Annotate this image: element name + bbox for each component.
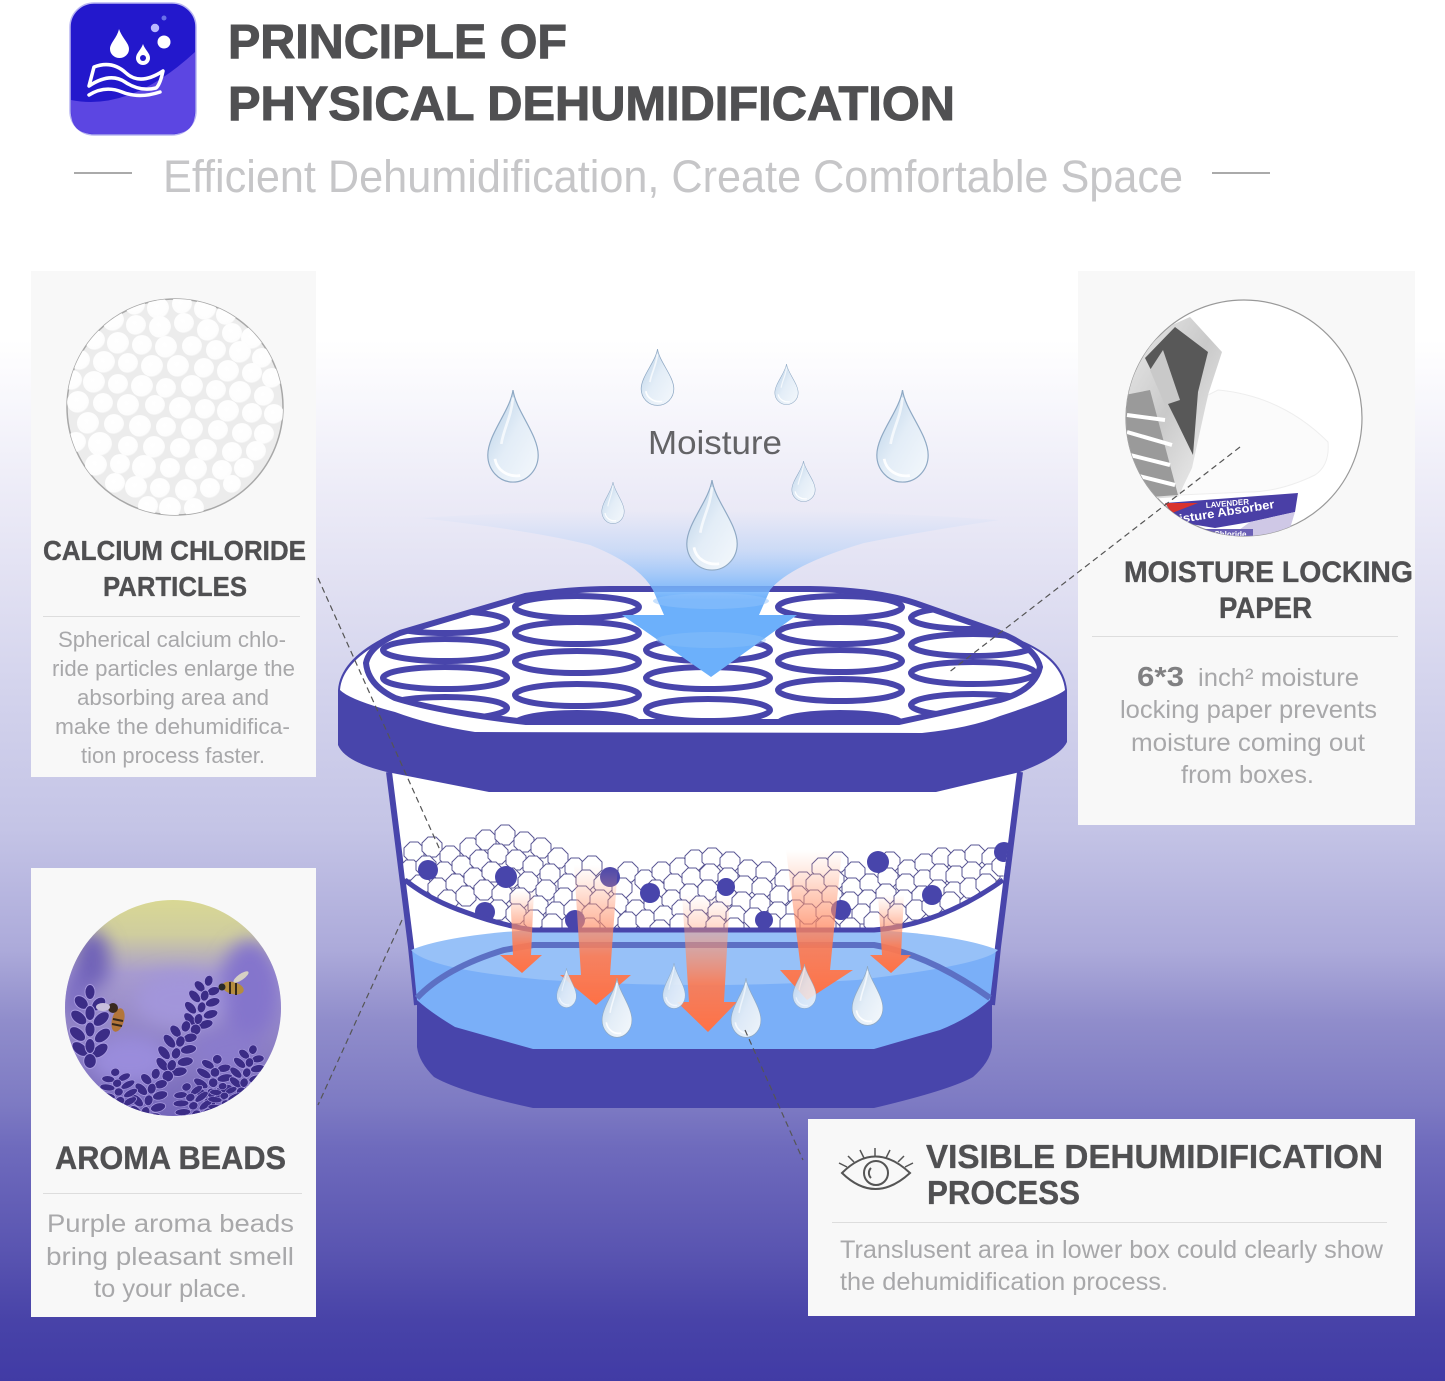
body text: aroma beads: Purple aroma beads xyxy=(47,1210,294,1238)
photo: opened box with foil seal: Chloride xyxy=(1214,530,1247,539)
heading: moisture locking paper: PAPER xyxy=(1219,592,1312,625)
body text: moisture locking paper: locking paper prevents xyxy=(1120,696,1377,724)
inner basket curve xyxy=(405,880,1003,930)
icon: eye xyxy=(839,1148,913,1189)
lid xyxy=(338,587,1067,792)
body text: calcium chloride: tion process faster. xyxy=(81,743,265,768)
body text: moisture locking paper xyxy=(1120,661,1377,789)
heading: moisture locking paper: MOISTURE LOCKING xyxy=(1124,556,1413,589)
dashed leader lines xyxy=(318,447,1240,1160)
orange moisture arrows xyxy=(500,850,911,1032)
body text: calcium chloride: absorbing area and xyxy=(77,685,269,710)
heading: moisture locking paper xyxy=(1124,556,1413,625)
body text: moisture locking paper: 6*3 xyxy=(1137,661,1184,692)
calcium chloride granules xyxy=(403,824,1008,928)
droplets inside box xyxy=(557,963,883,1037)
label: moisture: Moisture xyxy=(648,424,782,461)
heading: visible dehumidification process: PROCESS xyxy=(927,1174,1080,1211)
heading: calcium chloride particles: PARTICLES xyxy=(103,571,247,602)
panel: aroma beads xyxy=(31,868,316,1317)
blue moisture funnel arrow xyxy=(420,509,1000,677)
panel: visible dehumidification process xyxy=(808,1119,1415,1316)
photo: opened box with foil seal xyxy=(1115,300,1362,540)
body text: calcium chloride: ride particles enlarge the xyxy=(52,656,295,681)
body text: moisture locking paper: from boxes. xyxy=(1181,761,1314,789)
body text: calcium chloride: Spherical calcium chlo- xyxy=(58,627,286,652)
app icon: water drops and waves xyxy=(70,3,196,135)
water reservoir xyxy=(411,930,998,1049)
icon: bees xyxy=(96,969,250,1033)
body text: visible dehumidification: Translusent area in lower box could clearly show xyxy=(840,1236,1384,1264)
photo: lavender and bees xyxy=(63,900,281,1133)
panel: calcium chloride particles xyxy=(31,271,316,777)
body text: calcium chloride xyxy=(52,627,295,768)
body text: aroma beads: bring pleasant smell xyxy=(46,1243,294,1271)
body text: visible dehumidification: the dehumidification process. xyxy=(840,1268,1168,1296)
body text: visible dehumidification xyxy=(840,1236,1384,1296)
body text: calcium chloride: make the dehumidifica- xyxy=(55,714,290,739)
body text: aroma beads: to your place. xyxy=(94,1275,247,1303)
heading: calcium chloride particles: CALCIUM CHLORIDE xyxy=(43,535,306,566)
subtitle with side rules: Efficient Dehumidification, Create Comfortable Space xyxy=(163,151,1183,202)
title: PRINCIPLE OF xyxy=(228,16,567,69)
heading: visible dehumidification process: VISIBLE DEHUMIDIFICATION xyxy=(926,1138,1383,1175)
body text: moisture locking paper: moisture coming out xyxy=(1131,729,1365,757)
box lower body xyxy=(389,772,1020,1108)
panel: moisture locking paper xyxy=(1078,271,1415,825)
water droplets xyxy=(488,349,928,570)
photo: opened box with foil seal: isture Absorber xyxy=(1178,497,1276,526)
title xyxy=(228,16,955,131)
dehumidifier box illustration xyxy=(338,587,1067,1108)
heading: aroma beads: AROMA BEADS xyxy=(55,1140,286,1176)
body text: moisture locking paper: inch² moisture xyxy=(1198,664,1359,692)
photo: opened box with foil seal: LAVENDER xyxy=(1205,497,1250,510)
title: PHYSICAL DEHUMIDIFICATION xyxy=(228,78,955,131)
heading: visible dehumidification process xyxy=(926,1138,1383,1211)
body text: aroma beads xyxy=(46,1210,294,1303)
photo: white calcium chloride spheres xyxy=(62,294,284,519)
heading: calcium chloride particles xyxy=(43,535,306,602)
